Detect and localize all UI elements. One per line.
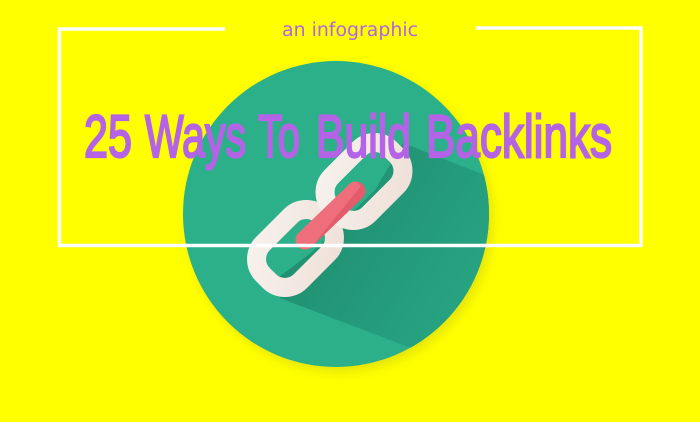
icon: chain link badge (183, 61, 500, 372)
title: Build (316, 103, 411, 170)
chain link: lower (247, 200, 344, 297)
chain link: upper (316, 133, 412, 230)
subtitle: an infographic (282, 20, 418, 41)
chain link: red connector (305, 191, 356, 240)
frame (60, 28, 641, 246)
title: Ways (145, 103, 246, 170)
title: Backlinks (426, 103, 612, 170)
title: To (258, 103, 300, 170)
long shadow (280, 143, 489, 348)
title: 25 (84, 103, 132, 170)
